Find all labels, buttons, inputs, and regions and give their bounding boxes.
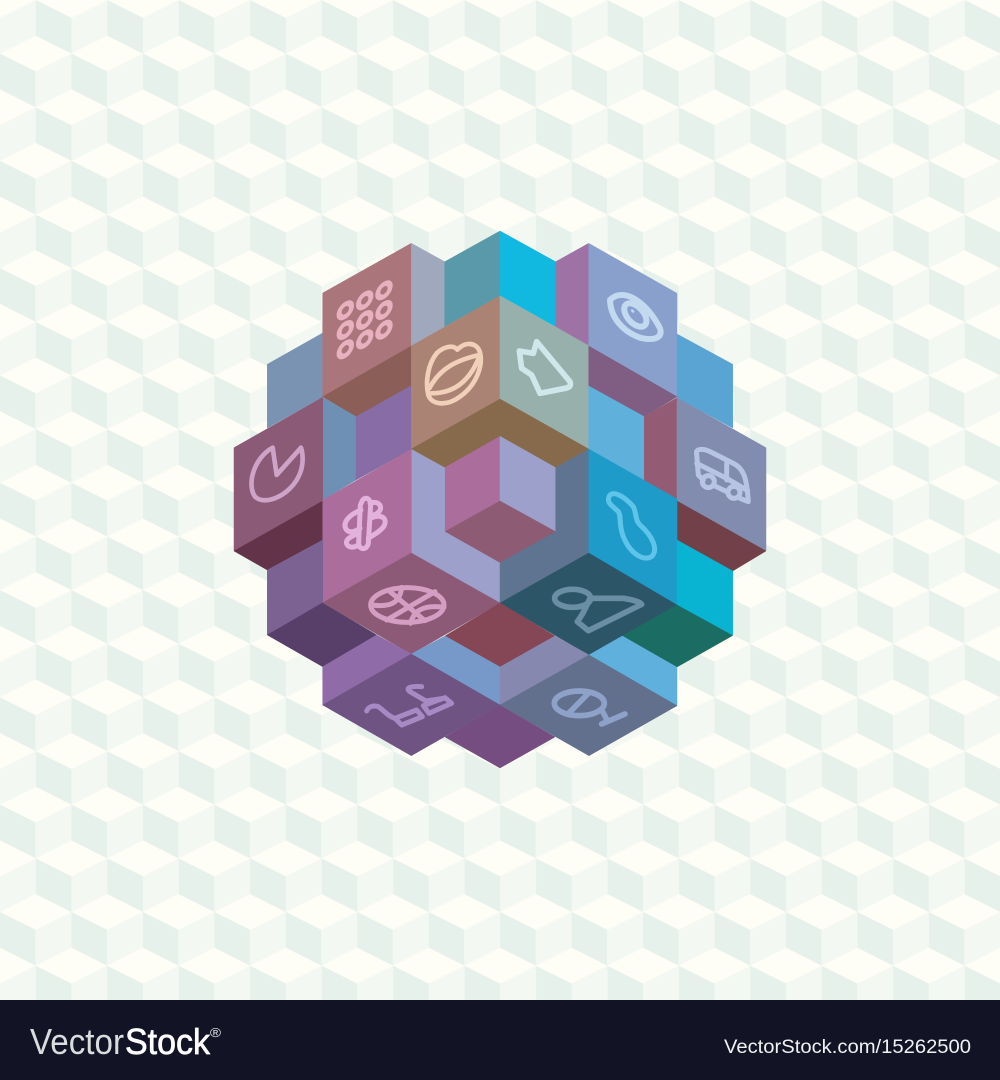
footer logo: VectorStock: ® [210,1025,221,1040]
icon: glasses [367,686,452,725]
icon: magnifier [554,691,625,724]
isometric cube cluster [234,231,766,768]
icon: lips [427,344,481,403]
icon: pie chart [251,448,303,500]
footer bar [0,1000,1000,1080]
footer logo: VectorStock: Vector [30,1021,124,1062]
icon: music note [608,494,655,558]
icon: eye [610,295,661,339]
lower faces [267,449,733,768]
icon: dollar sign [345,498,385,549]
icon: van [696,449,748,502]
upper faces [267,231,733,428]
footer image id: VectorStock.com/15262500 [724,1037,971,1058]
footer logo: VectorStock: Stock [125,1021,211,1062]
middle faces [234,296,766,571]
icon: wolf head [519,342,570,393]
icon: person [555,589,642,631]
icon: basketball [371,587,444,623]
footer logo: VectorStock [30,1021,221,1062]
icon: dots grid [339,281,390,359]
central recess [411,436,589,603]
